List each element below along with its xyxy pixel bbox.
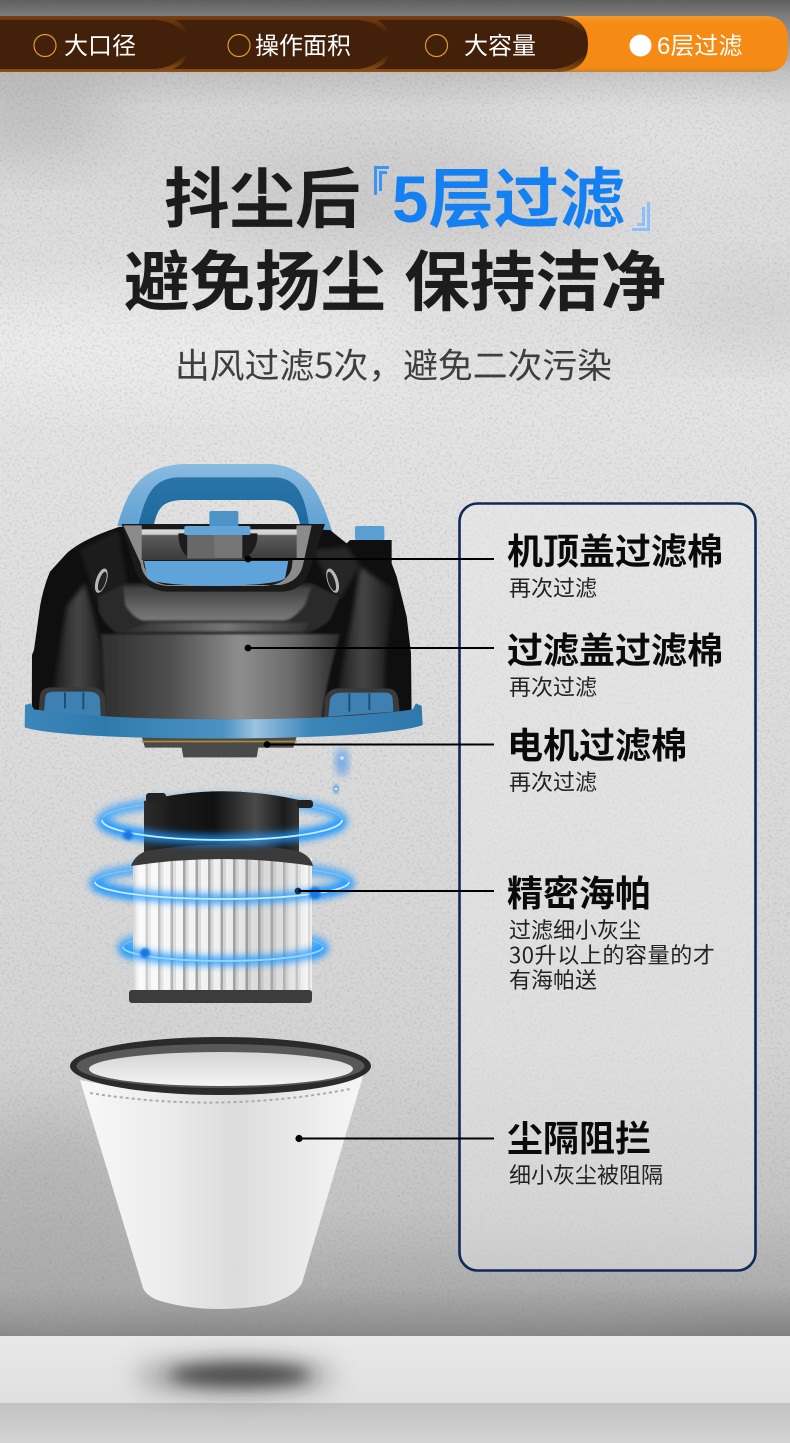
bag body [80,1076,363,1309]
front skirt [101,634,340,721]
bracket left [374,166,389,195]
stitching shade [90,1089,350,1103]
vent holes [92,567,342,594]
handle [117,464,332,532]
tab: 大容量: 大容量 [464,33,536,60]
blue base ring [25,703,423,739]
shadow under dust bag [135,1358,335,1394]
label: 精密海帕: 过滤细小灰尘 [509,913,641,945]
rings back [95,800,349,961]
label: 尘隔阻拦: 尘隔阻拦 [507,1118,651,1159]
label: 机顶盖过滤棉: 机顶盖过滤棉 [507,531,723,572]
ring glow points [123,830,321,958]
title: 避免扬尘 保持洁净 [124,246,666,319]
rings front [95,820,349,961]
title: 抖尘后 [164,163,361,236]
bottom disk [129,990,312,1003]
label: 精密海帕: 有海帕送 [509,963,597,995]
floor ledge [0,1336,790,1443]
label: 精密海帕 [507,873,715,995]
pleats [133,858,312,990]
tab: 大口径 [0,16,189,72]
label: 尘隔阻拦 [507,1118,663,1190]
collar [131,844,313,866]
subtitle: 出风过滤5次，避免二次污染 [175,339,612,389]
black shell [27,523,420,723]
bolt [178,533,257,558]
label: 过滤盖过滤棉: 再次过滤 [509,670,597,702]
rim ribs [76,1044,364,1088]
tab: 6层过滤 active: 6层过滤 [657,33,742,60]
label: 机顶盖过滤棉 [507,531,723,603]
label: 过滤盖过滤棉 [507,630,723,702]
tab: 大容量 [350,16,588,72]
left vent [38,687,106,720]
right knob [355,526,384,540]
label: 电机过滤棉: 再次过滤 [509,765,597,797]
leader: 精密海帕 [295,888,494,894]
bracket right [632,202,650,231]
leader lines [245,556,494,1142]
label: 精密海帕: 精密海帕 [507,873,651,914]
panel: filter labels [460,504,756,1270]
label: 电机过滤棉: 电机过滤棉 [507,725,687,766]
black cup [144,791,299,852]
product: machine lid [25,464,423,757]
label: 电机过滤棉 [507,725,687,797]
leader: 过滤盖过滤棉 [245,645,494,651]
tab: 操作面积 [150,16,391,72]
shoulder outer band [98,583,340,633]
tab: 大口径: 大口径 [64,33,136,60]
label: 机顶盖过滤棉: 再次过滤 [509,571,597,603]
shoulder light trapezoid [123,587,312,621]
label: 精密海帕: 30升以上的容量的才 [509,938,715,970]
label: 尘隔阻拦: 细小灰尘被阻隔 [509,1158,663,1190]
tab: 操作面积: 操作面积 [255,33,351,60]
recess with blue panel [122,511,325,592]
title: 5层过滤 [392,163,625,236]
right vent [323,688,400,720]
motor base [142,737,297,757]
leader: 电机过滤棉 [264,741,494,748]
leader: 机顶盖过滤棉 [245,556,494,562]
title [124,163,666,319]
tab: 6层过滤 active [540,16,788,72]
product: dust bag [70,1037,371,1309]
shoulder streak [123,623,310,632]
rubber rim [70,1037,371,1095]
label: 过滤盖过滤棉: 过滤盖过滤棉 [507,630,723,671]
bag inside [89,1052,353,1086]
tabs [146,793,313,808]
blue sparks [333,748,349,794]
navigation bar [0,16,788,72]
product: HEPA filter with blue rings [95,791,349,1003]
leader: 尘隔阻拦 [295,1135,494,1142]
